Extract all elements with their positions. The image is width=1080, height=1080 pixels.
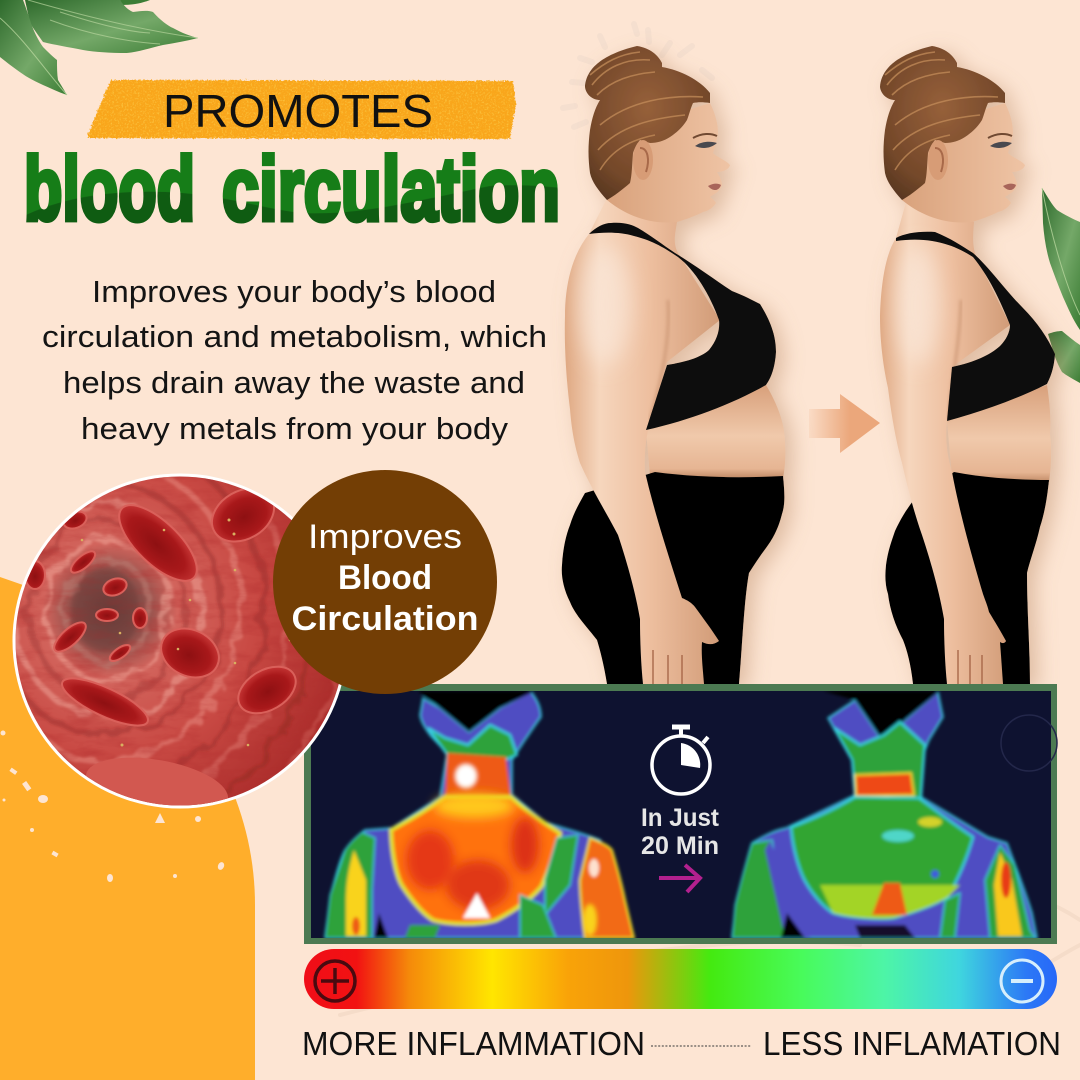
blood vessel circle image (12, 474, 342, 808)
head after (880, 46, 1025, 223)
tape banner (87, 80, 516, 139)
icon: top-left leaves (0, 0, 198, 95)
label: more inflammation: MORE INFLAMMATION (302, 1025, 645, 1062)
description text (42, 274, 547, 446)
torso and arm after (880, 195, 1010, 684)
bra before (589, 223, 776, 430)
arm contour (948, 300, 961, 420)
arm contour (650, 300, 668, 420)
dotted connector (651, 1045, 751, 1047)
label: in just 20 min: 20 Min (641, 832, 719, 860)
arm highlight (579, 245, 631, 365)
label: in just 20 min (641, 804, 720, 860)
icon: right leaves (1042, 188, 1080, 383)
description text: circulation and metabolism, which (42, 319, 547, 354)
thermal body: before (325, 691, 634, 938)
torso and arm before (565, 198, 720, 684)
inflammation colour scale (304, 949, 1057, 1009)
leggings before (562, 472, 784, 684)
description text: Improves your body’s blood (92, 274, 496, 309)
decorative sunburst behind head (563, 24, 712, 127)
arrow: magenta (659, 865, 700, 892)
thermal body: after (732, 691, 1037, 938)
faint background swooshes (340, 900, 1080, 1015)
fingers before (653, 650, 682, 684)
heading: PROMOTES: PROMOTES (163, 85, 433, 137)
description text: heavy metals from your body (81, 411, 509, 446)
fingers after (958, 650, 982, 684)
woman before (562, 46, 785, 684)
belly after (947, 385, 1051, 482)
faint circle watermark (1001, 715, 1057, 771)
icon: minus (1001, 960, 1043, 1002)
description text: helps drain away the waste and (63, 365, 525, 400)
belly before (646, 385, 785, 478)
heading: blood circulation: blood (24, 140, 195, 240)
badge: improves blood circulation: Improves (308, 518, 462, 556)
label: less inflamation: LESS INFLAMATION (763, 1025, 1061, 1062)
thermal image panel (304, 684, 1057, 944)
arm highlight (896, 245, 940, 365)
confetti dots (0, 730, 225, 882)
badge: improves blood circulation: Blood (338, 559, 432, 597)
orange corner shape (0, 577, 255, 1080)
badge: improves blood circulation (273, 470, 497, 694)
heading: blood circulation: circulation (222, 140, 560, 240)
head before (585, 46, 730, 223)
woman after (880, 46, 1055, 684)
bra after (896, 232, 1055, 421)
arrow: before to after (809, 394, 880, 453)
heading: blood circulation (24, 140, 560, 240)
icon: stopwatch (652, 727, 710, 794)
leggings after (885, 472, 1049, 684)
badge: improves blood circulation: Circulation (292, 600, 478, 638)
label: in just 20 min: In Just (641, 804, 720, 832)
icon: plus (315, 961, 355, 1001)
